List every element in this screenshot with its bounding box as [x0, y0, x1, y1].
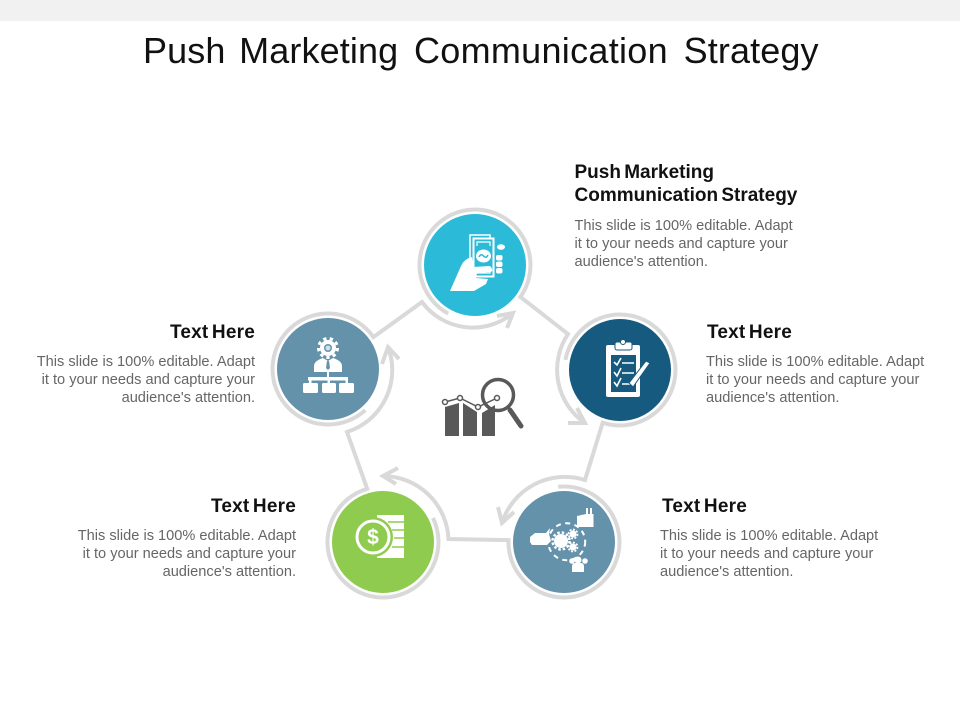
text block: left: [37, 322, 255, 406]
title: Push Marketing Communication Strategy: [143, 30, 819, 71]
body: right: audience's attention.: [706, 390, 839, 406]
heading: top: [574, 162, 798, 206]
circle: bottom right steel: [513, 491, 615, 593]
icon: logistics gears: [530, 508, 594, 572]
heading: right: Text Here: [707, 322, 792, 343]
heading: bottom left: Text Here: [211, 496, 296, 517]
body: left: it to your needs and capture your: [42, 372, 255, 388]
heading: top: Push Marketing: [574, 162, 714, 183]
body: left: [37, 354, 255, 406]
circle: left steel: [277, 318, 379, 420]
body: top: audience's attention.: [574, 254, 708, 270]
body: bottom left: it to your needs and capture your: [83, 546, 296, 562]
icon: chart with magnifier: [442, 380, 521, 436]
text block: bottom left: [78, 496, 296, 580]
icon: dollar coins: $: [367, 526, 379, 549]
body: right: it to your needs and capture your: [706, 372, 919, 388]
body: bottom left: audience's attention.: [163, 564, 296, 580]
body: top: This slide is 100% editable. Adapt: [574, 218, 793, 234]
body: right: [706, 354, 924, 406]
body: bottom right: it to your needs and capture your: [660, 546, 873, 562]
text block: right: [706, 322, 924, 406]
body: right: This slide is 100% editable. Adapt: [706, 354, 924, 370]
body: bottom left: [78, 528, 296, 580]
heading: top: Communication Strategy: [574, 185, 797, 206]
heading: bottom right: Text Here: [662, 496, 747, 517]
body: left: This slide is 100% editable. Adapt: [37, 354, 255, 370]
body: bottom right: [660, 528, 878, 580]
body: bottom right: audience's attention.: [660, 564, 793, 580]
icon: hand holding money: [450, 235, 505, 291]
icon: clipboard checklist: [606, 340, 650, 397]
text block: top: [574, 162, 798, 270]
icon: dollar coins: [353, 515, 404, 558]
text block: bottom right: [660, 496, 878, 580]
body: left: audience's attention.: [122, 390, 255, 406]
circle: top cyan: [424, 214, 526, 316]
top bar: [0, 0, 960, 21]
body: bottom right: This slide is 100% editable. Adapt: [660, 528, 878, 544]
arrowheads: [497, 313, 513, 328]
body: top: [574, 218, 793, 270]
connector rings and arrows: [272, 209, 675, 598]
circle: bottom left green: [332, 491, 434, 593]
icon: manager with gear and org chart: [303, 338, 354, 393]
body: bottom left: This slide is 100% editable. Adapt: [78, 528, 296, 544]
body: top: it to your needs and capture your: [574, 236, 788, 252]
heading: left: Text Here: [170, 322, 255, 343]
circle: right navy: [569, 319, 671, 421]
